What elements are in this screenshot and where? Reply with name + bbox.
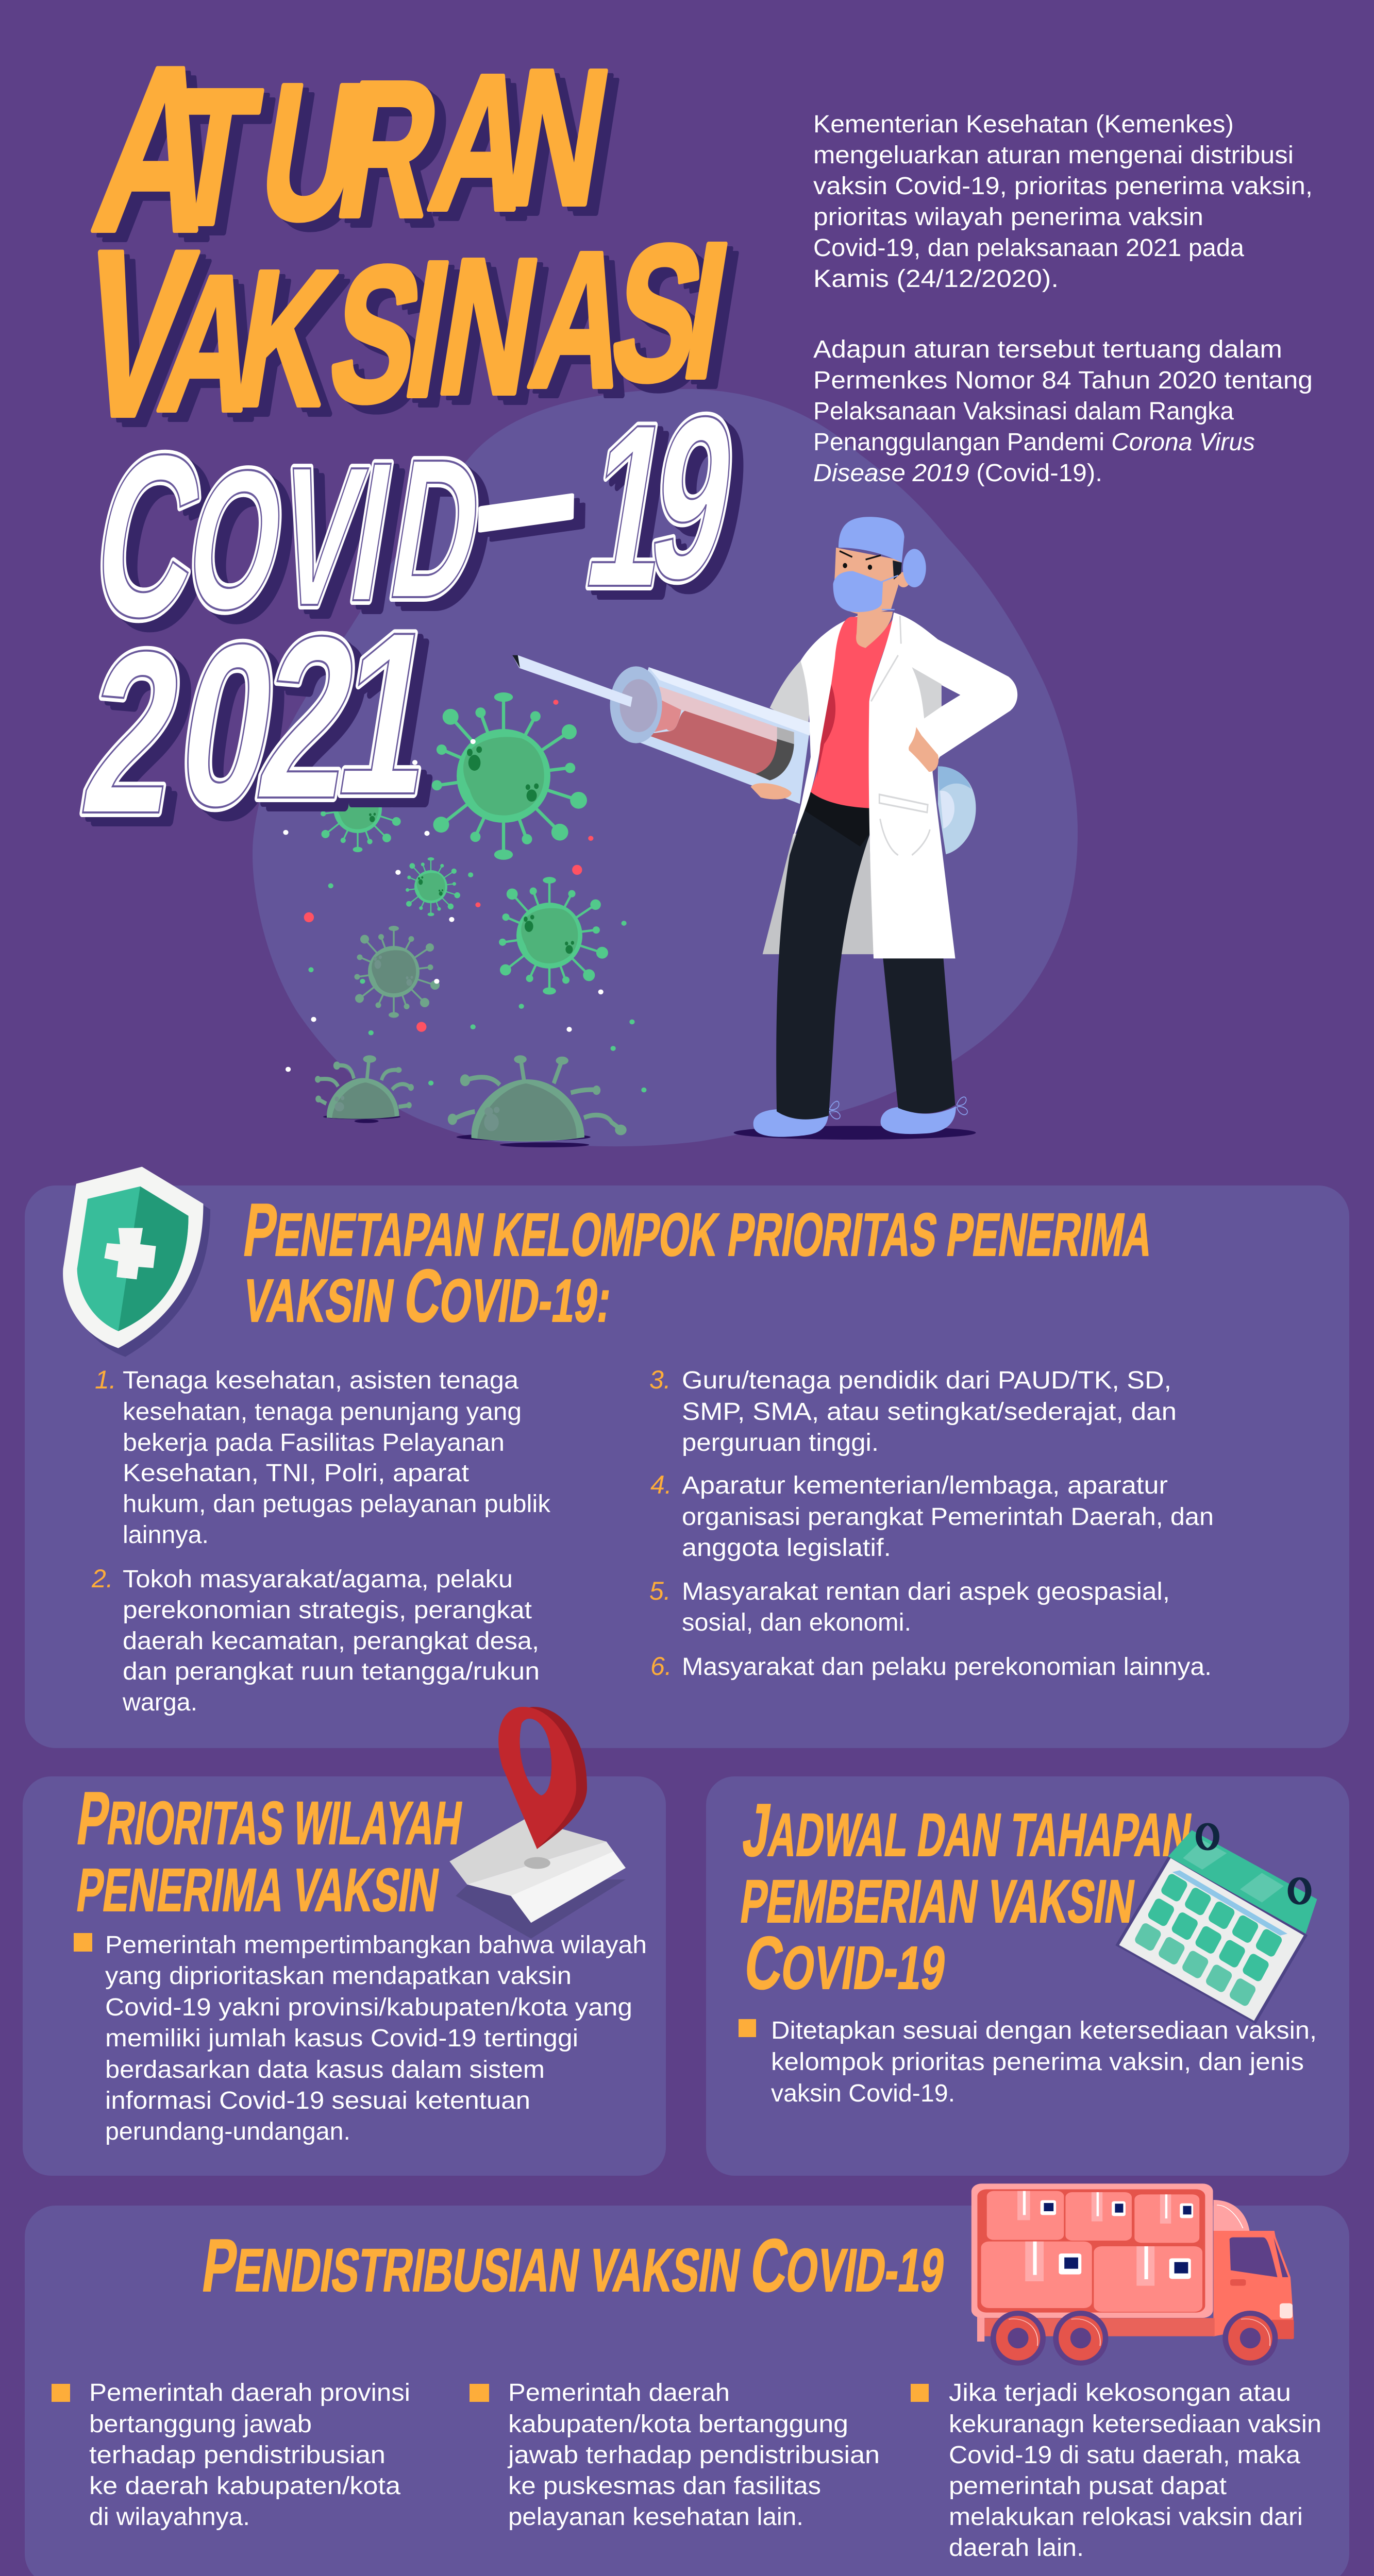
shoes — [753, 1097, 967, 1137]
column 1: Pemerintah daerah provinsi — [89, 2379, 410, 2406]
column 2: jawab terhadap pendistribusian — [507, 2442, 880, 2469]
intro text: vaksin Covid-19, prioritas penerima vaksin, — [813, 173, 1313, 200]
virus right — [499, 877, 608, 995]
column 2: ke puskesmas dan fasilitas — [508, 2472, 821, 2500]
panel: kelompok prioritas — [25, 1167, 1349, 1748]
heading: PENERIMA VAKSIN — [73, 1857, 443, 1924]
list left: Tokoh masyarakat/agama, pelaku — [123, 1566, 513, 1593]
left sleeve — [770, 661, 812, 729]
list right: 3. — [649, 1365, 671, 1394]
intro text: prioritas wilayah penerima vaksin — [813, 204, 1203, 231]
list right: organisasi perangkat Pemerintah Daerah, dan — [682, 1503, 1214, 1531]
list left: 2. — [91, 1564, 113, 1593]
icon: map pin — [498, 1707, 587, 1849]
list left — [91, 1365, 551, 1716]
intro text: Pelaksanaan Vaksinasi dalam Rangka — [813, 398, 1234, 425]
icon: truck — [971, 2183, 1294, 2366]
list left: daerah kecamatan, perangkat desa, — [123, 1628, 539, 1655]
text: Pemerintah mempertimbangkan bahwa wilayah — [105, 1931, 647, 1959]
title line: Covid-19 — [80, 368, 751, 666]
heading — [736, 1788, 1197, 2005]
coat back — [763, 829, 874, 954]
list left: 1. — [95, 1365, 116, 1394]
column 1: di wilayahnya. — [89, 2503, 250, 2531]
text: vaksin Covid-19. — [771, 2080, 955, 2107]
text: Covid-19 yakni provinsi/kabupaten/kota yang — [105, 1994, 632, 2021]
heading — [73, 1776, 468, 1924]
icon: map — [449, 1819, 626, 1939]
intro text: Covid-19, dan pelaksanaan 2021 pada — [813, 234, 1244, 262]
text — [739, 2017, 1317, 2107]
list right: perguruan tinggi. — [682, 1429, 879, 1456]
title line: Covid-19: 19 — [572, 368, 751, 635]
heading: PENDISTRIBUSIAN VAKSIN COVID-19 — [198, 2224, 950, 2307]
title line: Covid-19: - — [466, 378, 588, 614]
list left: dan perangkat ruun tetangga/rukun — [123, 1658, 540, 1685]
column 3: melakukan relokasi vaksin dari — [949, 2503, 1303, 2531]
column 1: bertanggung jawab — [89, 2411, 312, 2438]
illustration backdrop blob — [253, 389, 1078, 1146]
heading: VAKSIN COVID-19: — [239, 1254, 617, 1337]
list right: sosial, dan ekonomi. — [682, 1609, 911, 1636]
dissolving viruses and particles — [283, 700, 646, 1147]
mask — [833, 571, 898, 612]
panel: pendistribusian — [25, 2183, 1349, 2576]
surgical cap — [839, 517, 926, 587]
column 1: terhadap pendistribusian — [89, 2442, 386, 2469]
list right: SMP, SMA, atau setingkat/sederajat, dan — [682, 1398, 1177, 1426]
title line: Covid-19: COVID — [80, 406, 498, 666]
bag behind coat — [938, 766, 976, 854]
column 1: ke daerah kabupaten/kota — [89, 2472, 400, 2500]
half virus left — [315, 1055, 414, 1123]
text: Ditetapkan sesuai dengan ketersediaan vaksin, — [771, 2017, 1317, 2044]
text: kelompok prioritas penerima vaksin, dan jenis — [771, 2048, 1304, 2076]
virus large — [432, 692, 587, 860]
viruses illustration — [283, 692, 646, 1147]
list right: Guru/tenaga pendidik dari PAUD/TK, SD, — [682, 1367, 1171, 1394]
intro text: Disease 2019 (Covid-19). — [813, 460, 1102, 487]
column 3: pemerintah pusat dapat — [949, 2472, 1227, 2500]
hand on hip — [909, 727, 939, 772]
column 2: Pemerintah daerah — [508, 2379, 730, 2406]
text — [74, 1931, 647, 2145]
list left: warga. — [122, 1689, 197, 1716]
text: berdasarkan data kasus dalam sistem — [105, 2056, 545, 2083]
syringe hand — [750, 783, 792, 800]
title line: Aturan: ATURAN — [81, 18, 623, 280]
column 2: pelayanan kesehatan lain. — [508, 2503, 803, 2531]
intro text: Permenkes Nomor 84 Tahun 2020 tentang — [813, 367, 1313, 394]
list left: Kesehatan, TNI, Polri, aparat — [123, 1460, 469, 1487]
text: perundang-undangan. — [105, 2118, 350, 2145]
dots red — [304, 700, 593, 1032]
heading — [239, 1188, 1159, 1337]
intro text: Kementerian Kesehatan (Kemenkes) — [813, 111, 1234, 138]
column 3 — [911, 2379, 1321, 2562]
column 3: kekuranagn ketersediaan vaksin — [949, 2411, 1321, 2438]
list right: Aparatur kementerian/lembaga, aparatur — [682, 1472, 1168, 1499]
list right: anggota legislatif. — [682, 1534, 891, 1562]
list right: 6. — [650, 1652, 672, 1681]
title line: Covid-19: COVID — [80, 406, 498, 666]
half virus right — [448, 1055, 627, 1147]
panel: prioritas wilayah — [23, 1776, 666, 2176]
list right: Masyarakat dan pelaku perekonomian lainnya. — [682, 1653, 1212, 1681]
face — [834, 548, 910, 615]
list left: bekerja pada Fasilitas Pelayanan — [123, 1429, 505, 1456]
virus small — [406, 857, 460, 916]
title line: 2021: 2021 — [70, 584, 452, 862]
column 3: Jika terjadi kekosongan atau — [949, 2379, 1291, 2406]
column 3: daerah lain. — [949, 2534, 1084, 2562]
column 3: Covid-19 di satu daerah, maka — [949, 2442, 1300, 2469]
icon: calendar — [1117, 1824, 1317, 2022]
dots green — [308, 872, 646, 1092]
syringe — [512, 655, 811, 804]
intro text: Penanggulangan Pandemi Corona Virus — [813, 429, 1255, 456]
column 2: kabupaten/kota bertanggung — [508, 2411, 848, 2438]
heading: PEMBERIAN VAKSIN — [736, 1868, 1139, 1936]
title line: Covid-19: 19 — [572, 368, 751, 635]
coat left panel — [793, 616, 858, 840]
virus behind title — [321, 766, 401, 852]
list left: kesehatan, tenaga penunjang yang — [123, 1398, 522, 1426]
intro text: Adapun aturan tersebut tertuang dalam — [813, 336, 1282, 363]
trousers — [776, 792, 956, 1120]
dots white — [283, 739, 604, 1072]
heading: COVID-19 — [740, 1921, 951, 2005]
text: informasi Covid-19 sesuai ketentuan — [105, 2087, 530, 2114]
text: memiliki jumlah kasus Covid-19 tertinggi — [105, 2025, 578, 2052]
list right — [649, 1365, 1214, 1681]
title line: 2021: 2021 — [70, 584, 452, 862]
list left: lainnya. — [123, 1521, 209, 1549]
title line: Vaksinasi: VAKSINASI — [64, 200, 741, 466]
intro text: Kamis (24/12/2020). — [813, 265, 1059, 293]
intro text — [813, 111, 1313, 487]
list left: Tenaga kesehatan, asisten tenaga — [123, 1367, 518, 1394]
intro text: mengeluarkan aturan mengenai distribusi — [813, 142, 1294, 169]
doctor with syringe — [512, 517, 1017, 1140]
virus faded — [355, 926, 440, 1018]
coat right — [869, 613, 1017, 958]
neck — [856, 612, 893, 648]
title — [64, 18, 751, 862]
ground shadow — [734, 1126, 976, 1140]
list right: Masyarakat rentan dari aspek geospasial, — [682, 1578, 1170, 1605]
list right: 5. — [649, 1577, 671, 1605]
icon: shield — [63, 1167, 210, 1357]
list right: 4. — [650, 1470, 672, 1499]
text: yang diprioritaskan mendapatkan vaksin — [105, 1962, 572, 1990]
panel: jadwal — [706, 1776, 1349, 2176]
heading: PRIORITAS WILAYAH — [73, 1776, 468, 1860]
list left: perekonomian strategis, perangkat — [123, 1597, 532, 1624]
column 1 — [52, 2379, 410, 2531]
list left: hukum, dan petugas pelayanan publik — [123, 1490, 551, 1518]
shirt — [811, 617, 894, 808]
column 2 — [470, 2379, 880, 2531]
